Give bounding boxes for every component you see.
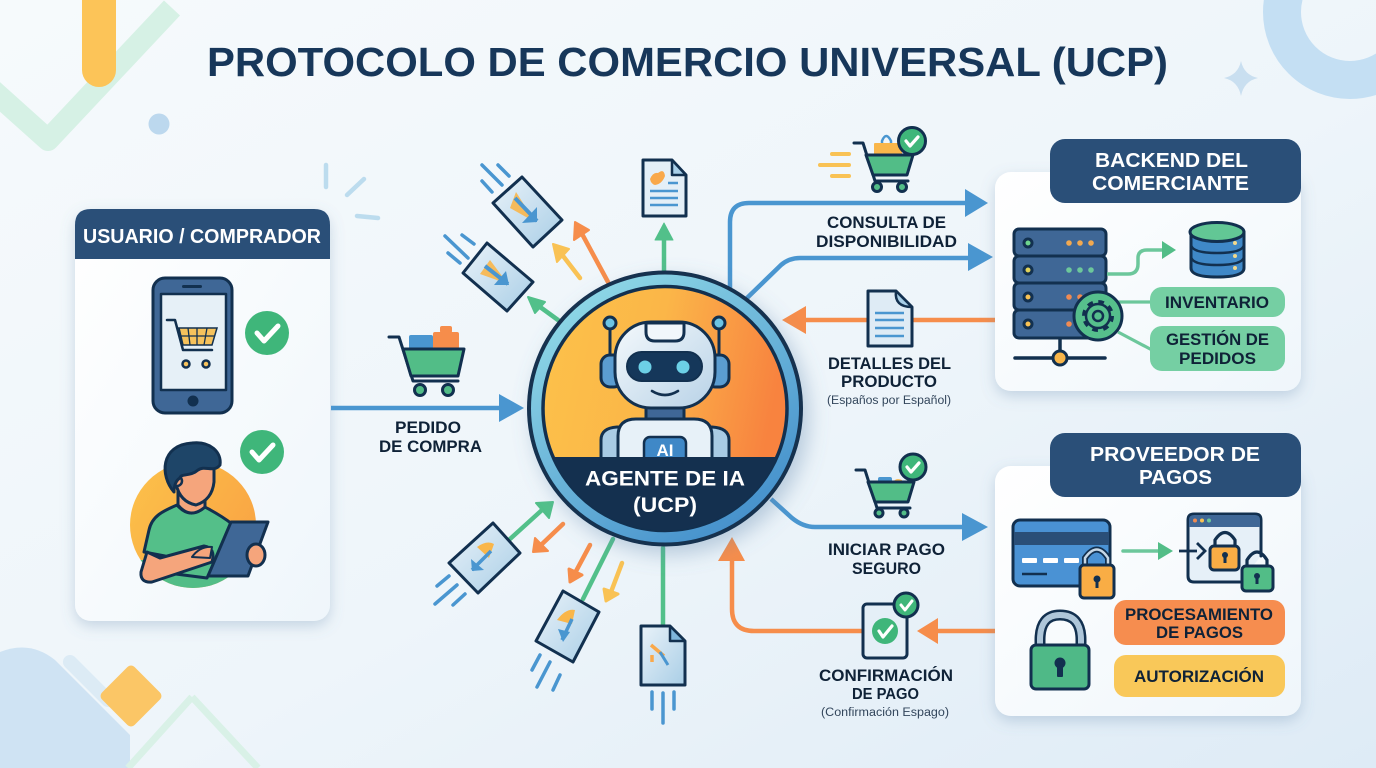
label: consulta de disponibilidad: CONSULTA DE: [827, 214, 946, 232]
label: confirmacion de pago: CONFIRMACIÓN: [819, 666, 953, 685]
panel: usuario / comprador: [75, 209, 330, 621]
label: detalles del producto: DETALLES DEL: [828, 355, 951, 373]
arrow: confirmacion from proveedor: [917, 618, 995, 644]
label: detalles del producto: (Españos por Español): [827, 395, 951, 407]
label: gestion de pedidos: [1150, 326, 1285, 371]
icon: robot: [601, 317, 729, 463]
label: autorizacion: AUTORIZACIÓN: [1134, 667, 1264, 686]
arrow: confirmacion up: [718, 537, 864, 631]
radial arrows: top: [528, 222, 673, 320]
label: confirmacion de pago: DE PAGO: [852, 686, 919, 703]
arrow: server to database: [1107, 241, 1176, 274]
hub label banner: [555, 457, 775, 529]
panel header: usuario: [75, 209, 330, 259]
label: iniciar pago seguro: INICIAR PAGO: [828, 541, 945, 559]
icon: server rack: [1014, 229, 1106, 365]
arrow: detalles del producto: [782, 306, 995, 334]
arrow: consulta de disponibilidad lower: [747, 243, 993, 298]
icon: shopping cart pedido: [389, 326, 464, 396]
label: pedido de compra: PEDIDO: [395, 419, 461, 437]
icon: envelope card 3: [435, 523, 520, 605]
label: detalles del producto: PRODUCTO: [841, 373, 937, 391]
label: procesamiento de pagos: PROCESAMIENTO: [1125, 606, 1273, 624]
icon: smartphone with cart: [153, 278, 232, 413]
panel header: proveedor: PAGOS: [1139, 466, 1212, 489]
icon: gear badge: [1074, 292, 1122, 340]
icon: database: [1190, 222, 1244, 277]
arrow: consulta de disponibilidad upper: [730, 189, 988, 290]
central hub: agente de IA: [529, 272, 801, 544]
label: autorizacion: [1114, 655, 1285, 697]
icon: document top: [643, 160, 686, 216]
label: gestion de pedidos: GESTIÓN DE: [1166, 330, 1269, 349]
panel header: backend: BACKEND DEL: [1095, 149, 1248, 172]
icon: person with tablet: [130, 443, 268, 600]
icon: credit card with lock: [1013, 520, 1114, 598]
icon: envelope card 1: [482, 165, 562, 247]
label: iniciar pago seguro: [828, 541, 945, 578]
icon: document detalles: [868, 291, 912, 346]
panel header: usuario: USUARIO / COMPRADOR: [83, 225, 321, 248]
label: procesamiento de pagos: DE PAGOS: [1156, 624, 1243, 642]
icon: envelope card 4: [532, 591, 599, 690]
icon: envelope card 2: [445, 235, 533, 311]
label: pedido de compra: DE COMPRA: [379, 438, 482, 456]
icon: check badge person: [240, 430, 284, 474]
decoration: top right ring and sparkle: [1224, 0, 1376, 96]
label: consulta de disponibilidad: [816, 214, 957, 251]
label: iniciar pago seguro: SEGURO: [852, 560, 921, 578]
icon: secure payment cart: [856, 454, 926, 517]
decoration: top left shapes: [0, 0, 172, 140]
panel: backend del comerciante: [995, 139, 1301, 391]
icon: document bottom: [641, 626, 685, 723]
arrow: card to browser: [1123, 542, 1173, 560]
arrow: pedido de compra: [331, 394, 524, 422]
decoration: bottom left shapes: [0, 648, 258, 768]
label: procesamiento de pagos: [1114, 600, 1285, 645]
icon: large green lock: [1031, 615, 1089, 689]
arrow: iniciar pago seguro: [771, 499, 988, 541]
icon: confirmation document: [863, 593, 918, 658]
title: PROTOCOLO DE COMERCIO UNIVERSAL (UCP): [207, 39, 1168, 85]
panel: proveedor de pagos: [995, 433, 1301, 716]
label: confirmacion de pago: [819, 666, 953, 719]
label: pedido de compra: [379, 419, 482, 456]
panel header: proveedor: [1050, 433, 1301, 497]
icon: browser with locks: [1179, 514, 1273, 591]
label: gestion de pedidos: PEDIDOS: [1179, 350, 1256, 368]
label: detalles del producto: [827, 355, 951, 407]
label: confirmacion de pago: (Confirmación Espago): [821, 707, 949, 719]
hub label banner: (UCP): [633, 494, 697, 517]
connectors: gear to labels: [1115, 302, 1152, 350]
icon: cart with check: [820, 128, 926, 192]
icon: robot: AI: [656, 441, 674, 460]
icon: check badge phone: [245, 311, 289, 355]
label: inventario: [1150, 287, 1285, 317]
radial arrows: bottom: [510, 502, 663, 625]
panel header: proveedor: PROVEEDOR DE: [1090, 443, 1260, 466]
hub label banner: AGENTE DE IA: [585, 468, 745, 490]
panel header: backend: COMERCIANTE: [1092, 172, 1249, 195]
panel header: backend: [1050, 139, 1301, 203]
label: inventario: INVENTARIO: [1165, 294, 1269, 312]
decoration: ticks near user panel: [326, 165, 378, 218]
label: consulta de disponibilidad: DISPONIBILIDAD: [816, 233, 957, 251]
